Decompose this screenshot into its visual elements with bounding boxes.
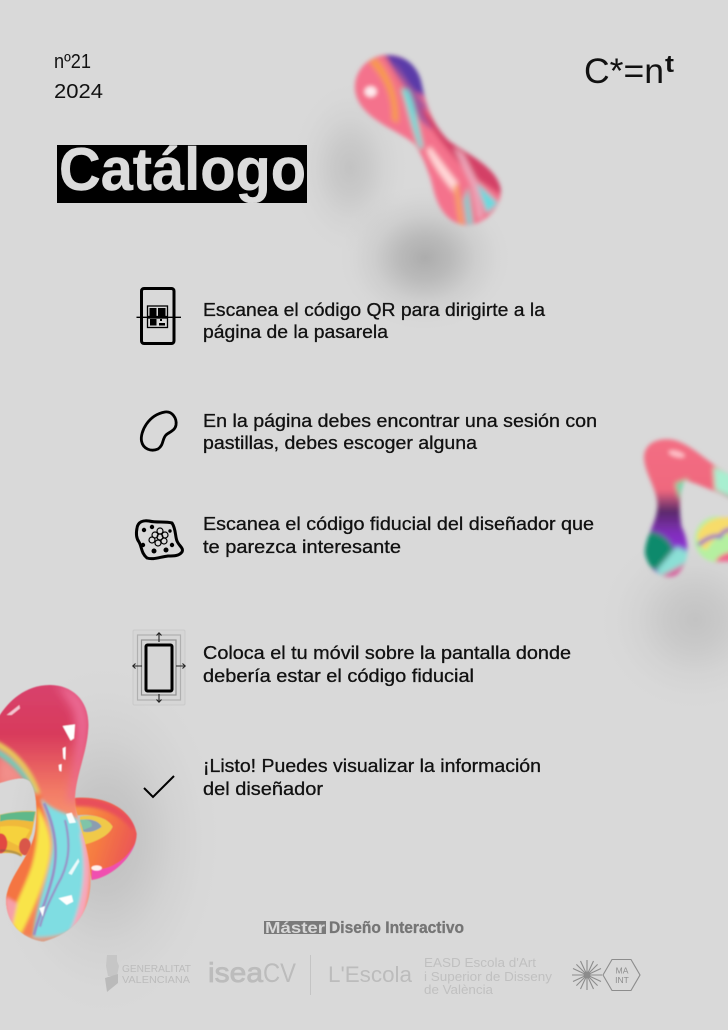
issue number and year [54, 51, 103, 103]
blob: right small [695, 517, 728, 562]
step 5 text: ¡Listo! Puedes visualizar la información [203, 755, 541, 776]
step 3 text: te parezca interesante [203, 536, 401, 557]
issue number and year: 2024 [54, 81, 103, 103]
step 1 text: Escanea el código QR para dirigirte a la [203, 299, 546, 320]
footer divider [310, 955, 312, 995]
step 5 [144, 755, 541, 799]
step 3 text [203, 513, 594, 557]
icon: pill bean [141, 412, 176, 450]
footer logo: iseaCV: isea [208, 957, 263, 988]
footer logo: iseaCV: CV [263, 958, 296, 988]
footer heading: Máster Diseño Interactivo [264, 919, 464, 937]
blob part: right loop [74, 796, 138, 880]
footer logo: Generalitat Valenciana: GENERALITAT [122, 963, 192, 975]
shadow: right blob [600, 530, 728, 710]
footer logo: iseaCV [208, 957, 296, 988]
footer logo: L'Escola: L'Escola [328, 962, 413, 987]
footer heading: Máster Diseño Interactivo: Máster [265, 920, 325, 937]
step 4 [133, 630, 571, 705]
icon: check mark [144, 776, 174, 797]
footer logo: MA INT: MA [616, 966, 629, 976]
step 3 [136, 513, 594, 559]
step 2 [141, 410, 597, 453]
step 1 [136, 288, 546, 344]
step 2 text [203, 410, 597, 453]
step 1 text: página de la pasarela [203, 321, 389, 342]
footer logo: Generalitat Valenciana: VALENCIANA [122, 974, 190, 986]
blob: top [352, 52, 504, 228]
issue number and year: nº21 [54, 51, 91, 73]
step 4 text [203, 642, 571, 686]
step 5 text [203, 755, 541, 799]
step 1 text [203, 299, 546, 342]
logo: C*=nt: t [665, 51, 674, 78]
footer logo: MA INT: INT [615, 975, 629, 985]
blob: left [0, 680, 143, 948]
footer logo: MA INT [572, 960, 640, 990]
footer logo: EASD [424, 955, 553, 997]
icon: QR scan phone [136, 288, 181, 344]
title: Catálogo: Catálogo [59, 136, 306, 203]
step 5 text: del diseñador [203, 778, 323, 799]
step 4 text: debería estar el código fiducial [203, 665, 474, 686]
blob part: main body [0, 680, 97, 948]
footer logo: EASD: de València [424, 982, 494, 997]
blob part: left tube [0, 811, 36, 857]
icon: fiducial marker [136, 521, 182, 559]
shadow: left blob [0, 665, 220, 1015]
logo: C*=nt: C*=n [584, 52, 664, 91]
step 3 text: Escanea el código fiducial del diseñador que [203, 513, 594, 534]
step 2 text: pastillas, debes escoger alguna [203, 432, 478, 453]
step 2 text: En la página debes encontrar una sesión con [203, 410, 597, 431]
footer logo: EASD: EASD Escola d'Art [424, 955, 536, 970]
step 4 text: Coloca el tu móvil sobre la pantalla donde [203, 642, 571, 663]
blob: right [641, 436, 728, 580]
footer heading: Máster Diseño Interactivo: Diseño Interactivo [329, 919, 464, 937]
shadow: top blob [292, 83, 510, 330]
icon: phone over screen [133, 630, 185, 705]
footer logo: Generalitat Valenciana [105, 955, 192, 992]
footer logo: EASD: i Superior de Disseny [424, 969, 553, 984]
